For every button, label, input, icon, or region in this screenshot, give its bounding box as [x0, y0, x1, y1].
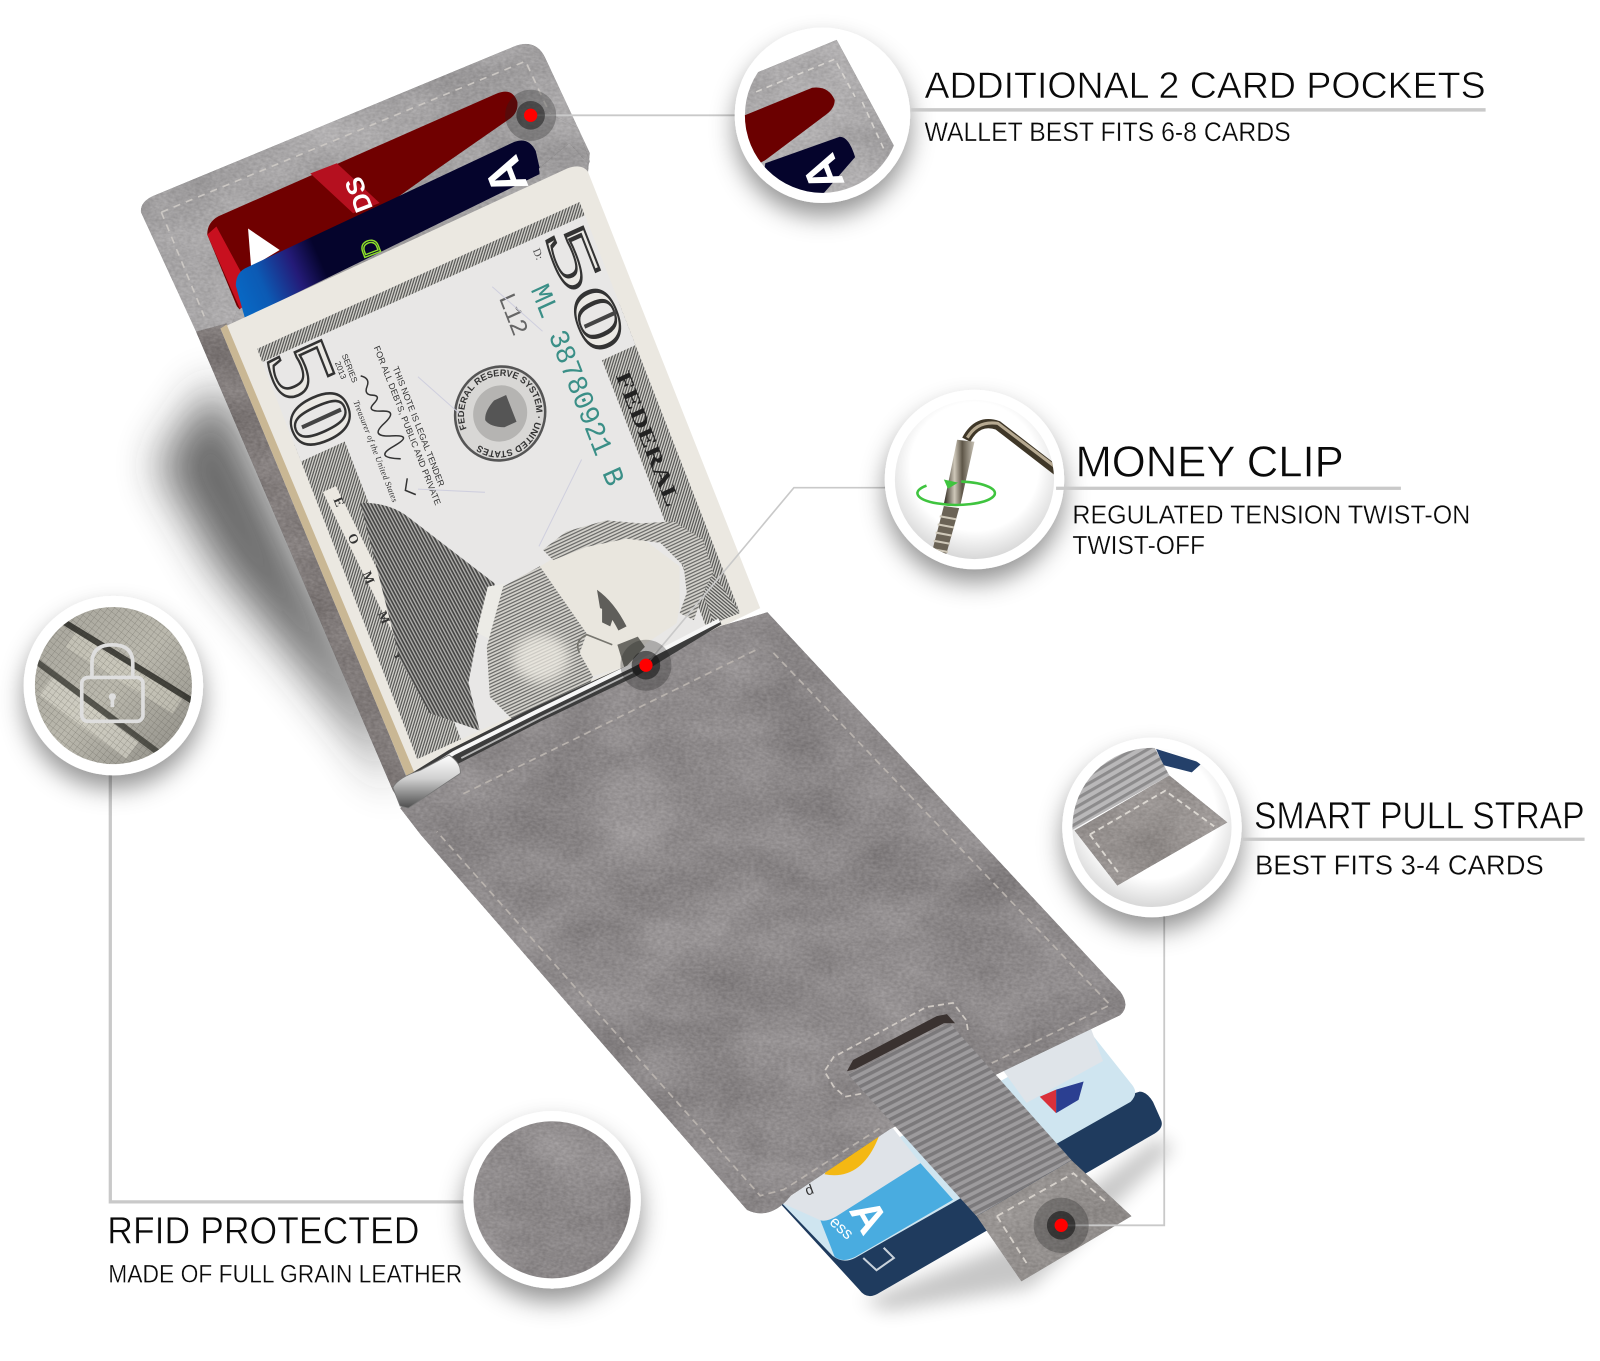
callout: money clip [1056, 437, 1470, 560]
back leather panel [141, 44, 590, 808]
card flag mark [1056, 1081, 1084, 1113]
callout: smart pull strap [1243, 794, 1585, 880]
lock icon [82, 645, 143, 721]
bottom cards sliding out [780, 1025, 1162, 1296]
legal tender text [332, 334, 452, 524]
callout: smart pull strap: BEST FITS 3-4 CARDS [1255, 849, 1544, 880]
portrait jacket [360, 503, 495, 730]
second pocket lip [539, 143, 588, 184]
connector line: clip [646, 488, 888, 665]
wallet shadow [158, 383, 393, 791]
card small mark: d [803, 1182, 816, 1199]
corner denomination top: 50 [530, 212, 641, 364]
portrait hair [543, 520, 713, 620]
card shadow under wallet [862, 1138, 1173, 1311]
navy card in second pocket: D [355, 235, 387, 261]
inset circle: money clip [885, 390, 1064, 569]
card small text: ess [826, 1213, 857, 1243]
connector line: rfid [110, 773, 469, 1202]
silver card right part [1000, 1025, 1103, 1103]
callout: money clip: MONEY CLIP [1075, 437, 1344, 486]
callout: RFID protected: MADE OF FULL GRAIN LEATHER [108, 1260, 462, 1288]
card outlined letter [863, 1248, 894, 1270]
callout: additional card pockets: WALLET BEST FITS 6-8 CARDS [924, 117, 1291, 147]
inset circle: card pockets [735, 28, 910, 203]
callout: additional card pockets: ADDITIONAL 2 CARD POCKETS [924, 65, 1486, 106]
callout: additional card pockets [911, 65, 1486, 147]
rear pocket strip [230, 110, 590, 329]
corner denomination bottom: 50 [246, 324, 375, 464]
money clip bar [393, 619, 721, 808]
federal legend: FEDERAL [611, 368, 685, 510]
inset circle: pull strap [1062, 738, 1242, 917]
corner denomination top [530, 212, 643, 370]
inset circle: RFID lock [24, 596, 203, 775]
portrait eye and brow [597, 590, 627, 631]
callout: RFID protected: RFID PROTECTED [107, 1210, 419, 1252]
card flag red [1040, 1090, 1056, 1113]
note background [257, 202, 740, 759]
watermark lines [362, 274, 613, 584]
plate letter: D: [530, 247, 545, 262]
hotspot: pockets [505, 90, 556, 141]
portrait moustache shadow [617, 637, 645, 668]
red card in rear pocket [207, 92, 518, 311]
legal tender text: THIS NOTE IS LEGAL TENDER [391, 365, 446, 488]
yellow logo [824, 1135, 880, 1175]
silver card left part [782, 1124, 920, 1221]
hotspot: clip [620, 640, 671, 691]
connector line: strap [1061, 908, 1164, 1225]
hatching to the right of the portrait [703, 573, 740, 623]
callout: money clip: REGULATED TENSION TWIST-ON [1072, 501, 1470, 529]
card letter: A [840, 1191, 897, 1242]
money clip head [393, 755, 460, 808]
banner lettering: E O M M Y [331, 495, 408, 663]
back panel stitching [161, 61, 563, 316]
inset circle: leather swatch [463, 1111, 641, 1289]
federal reserve seal: FEDERAL RESERVE SYSTEM · UNITED STATES [458, 370, 542, 458]
portrait face [540, 537, 680, 676]
front panel side stitching [437, 653, 1110, 1196]
pull strap ribbon [848, 1023, 1071, 1216]
blue card lower swatch [820, 1163, 953, 1260]
left inner leather strip [196, 323, 406, 808]
callout: money clip: TWIST-OFF [1072, 532, 1205, 560]
hotspot: strap [1034, 1198, 1089, 1253]
treasurer signature [355, 369, 424, 501]
navy card in second pocket: A [473, 149, 539, 204]
navy card in second pocket [236, 140, 541, 318]
callout: RFID protected [107, 1210, 462, 1288]
wallet back: pockets and banknote [140, 44, 760, 794]
red card in rear pocket: DS [340, 173, 379, 216]
front panel top stitching [463, 648, 760, 794]
navy card [780, 1092, 1162, 1296]
beard highlight [512, 634, 569, 683]
engraved border bands [257, 202, 740, 759]
legal tender text: Treasurer of the United States [351, 398, 400, 504]
banknote paper stack [221, 166, 760, 780]
strap slot opening [847, 1014, 955, 1071]
blue card [782, 1031, 1135, 1261]
portrait beard [487, 566, 593, 720]
fifty dollar note print [246, 202, 740, 759]
lower leather front panel [400, 612, 1125, 1213]
legal tender text: 2013 [333, 360, 348, 381]
pull strap leather tab [977, 1160, 1132, 1281]
portrait of Grant [360, 503, 740, 730]
portrait collar [477, 584, 505, 641]
connector line: pockets [531, 114, 737, 116]
slot and stitching around strap [824, 1003, 968, 1097]
plate code: L12 [491, 289, 532, 341]
portrait nose line [578, 635, 612, 653]
serial number: ML 38780921 B [522, 280, 630, 492]
legal tender text: SERIES [340, 352, 359, 385]
legal tender text: FOR ALL DEBTS, PUBLIC AND PRIVATE [372, 344, 443, 507]
inset circle: card pockets: A [792, 147, 855, 199]
